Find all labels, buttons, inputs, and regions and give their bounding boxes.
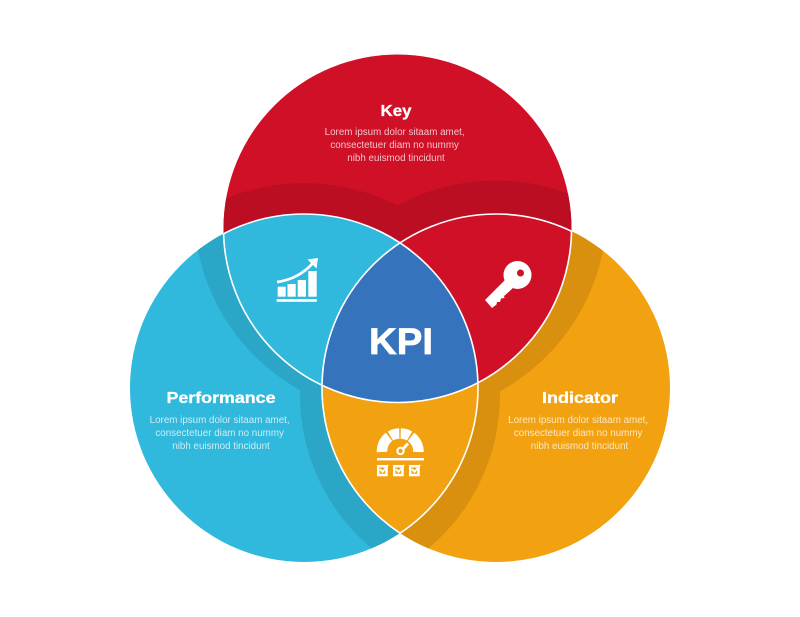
heading: Performance: Performance bbox=[166, 390, 276, 407]
center overlap: KPI (blue) bbox=[322, 244, 478, 402]
center label: KPI: KPI bbox=[369, 321, 433, 362]
text block: performance description: consectetuer diam no nummy bbox=[155, 428, 284, 439]
text block: key description: consectetuer diam no nummy bbox=[330, 140, 459, 151]
white outlines of overlaps bbox=[222, 213, 572, 534]
text block: key description: Lorem ipsum dolor sitaam amet, bbox=[325, 127, 465, 138]
text block: performance description: nibh euismod tincidunt bbox=[172, 441, 270, 452]
heading: Key: Key bbox=[380, 103, 412, 120]
icon: gauge with checkboxes bbox=[377, 434, 424, 475]
overlap: key and performance (cyan lens) bbox=[224, 214, 398, 384]
text block: indicator description: consectetuer diam no nummy bbox=[514, 428, 642, 439]
heading: Indicator: Indicator bbox=[542, 390, 618, 407]
icon: growth chart bbox=[277, 258, 318, 302]
text block: performance description: Lorem ipsum dolor sitaam amet, bbox=[150, 415, 290, 426]
circle: indicator (orange) bbox=[400, 231, 670, 562]
text block: key description: nibh euismod tincidunt bbox=[347, 153, 445, 164]
overlap: key and indicator (red lens) bbox=[402, 214, 570, 382]
icon: key bbox=[485, 261, 532, 308]
KPI venn infographic bbox=[130, 54, 670, 562]
text block: indicator description: Lorem ipsum dolor sitaam amet, bbox=[508, 415, 648, 426]
circle: performance (cyan) bbox=[130, 234, 400, 562]
circle: key (red) bbox=[224, 54, 572, 242]
text block: indicator description: nibh euismod tincidunt bbox=[531, 441, 629, 452]
overlap: performance and indicator (orange lens) bbox=[322, 384, 478, 532]
